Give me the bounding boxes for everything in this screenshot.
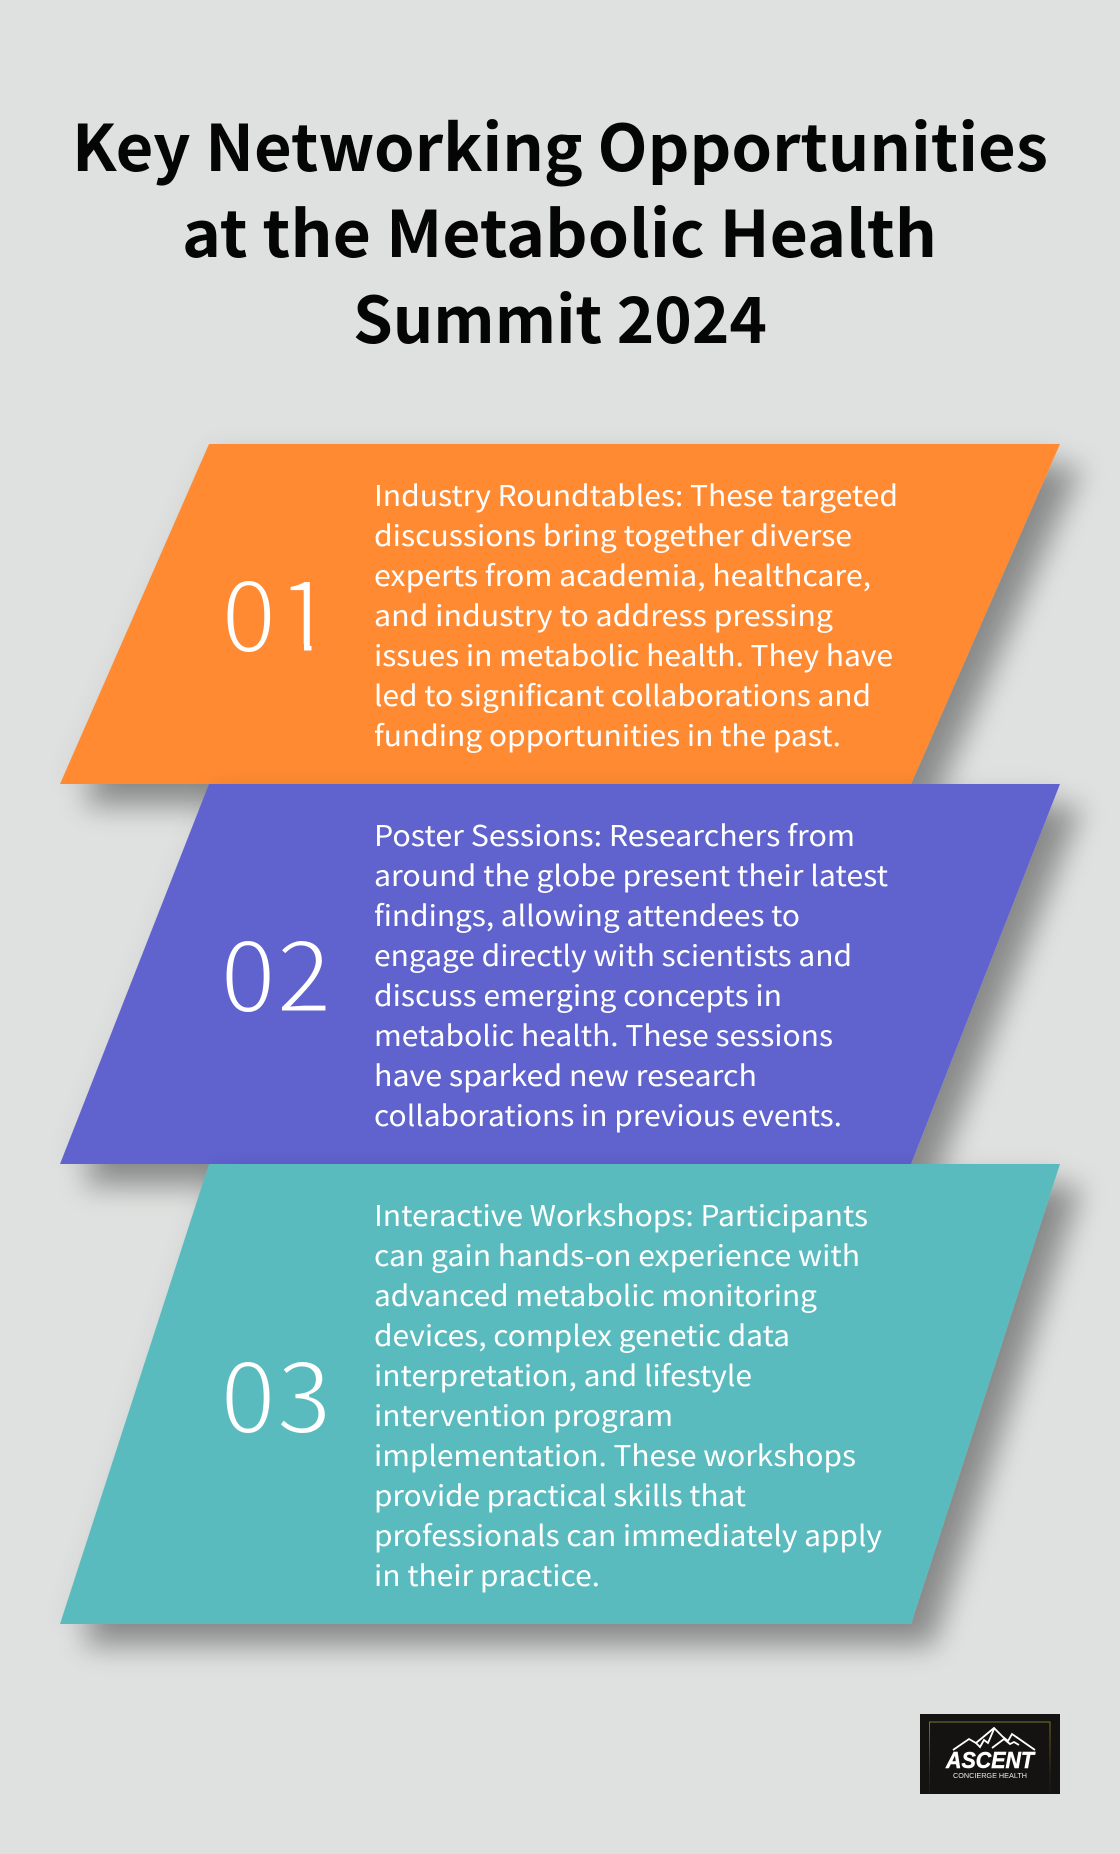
text: Interactive Workshops: in their practice. (374, 1554, 600, 1595)
text: Poster Sessions: engage directly with scientists and (374, 934, 852, 975)
panel: 02 Poster Sessions (60, 784, 1060, 1164)
text: Poster Sessions: Poster Sessions: Researchers from (374, 814, 855, 855)
number 01 (221, 536, 338, 681)
text: Industry Roundtables: funding opportunities in the past. (374, 714, 841, 755)
logo wordmark: ASCENT (945, 1747, 1036, 1773)
text: Industry Roundtables: Industry Roundtables: These targeted (374, 474, 898, 515)
text: Interactive Workshops: implementation. These workshops (374, 1434, 856, 1475)
text: Poster Sessions: metabolic health. These sessions (374, 1014, 833, 1055)
purple parallelogram (60, 784, 1060, 1164)
text: Poster Sessions: findings, allowing attendees to (374, 894, 800, 935)
text: Interactive Workshops: provide practical skills that (374, 1474, 746, 1515)
title: at the Metabolic Health (182, 184, 937, 276)
text: Industry Roundtables: experts from academia, healthcare, (374, 554, 871, 595)
text: Interactive Workshops: advanced metabolic monitoring (374, 1274, 817, 1315)
text: Interactive Workshops: professionals can immediately apply (374, 1514, 882, 1555)
text: Poster Sessions: collaborations in previous events. (374, 1094, 842, 1135)
panel: 03 Interactive Workshops (60, 1164, 1060, 1624)
text: Industry Roundtables: led to significant collaborations and (374, 674, 871, 715)
text: Poster Sessions: around the globe present their latest (374, 854, 888, 895)
text: Interactive Workshops (374, 1194, 882, 1595)
text: Industry Roundtables: and industry to address pressing (374, 594, 833, 635)
text: Interactive Workshops: interpretation, and lifestyle (374, 1354, 752, 1395)
teal parallelogram (60, 1164, 1060, 1624)
icon: mountains (953, 1728, 1035, 1750)
number 02: 02 (220, 896, 332, 1041)
logo: Ascent Concierge Health (920, 1714, 1060, 1794)
title (72, 98, 1048, 362)
text: Poster Sessions: discuss emerging concepts in (374, 974, 782, 1015)
text: Interactive Workshops: devices, complex genetic data (374, 1314, 790, 1355)
title: Summit 2024 (353, 270, 767, 362)
text: Industry Roundtables (374, 474, 898, 755)
title: Key Networking Opportunities (72, 98, 1048, 190)
number 01: 1 (277, 536, 332, 681)
text: Industry Roundtables: discussions bring together diverse (374, 514, 852, 555)
logo tagline: CONCIERGE HEALTH (953, 1771, 1027, 1780)
orange parallelogram (60, 444, 1060, 784)
text: Poster Sessions: have sparked new research (374, 1054, 757, 1095)
text: Interactive Workshops: intervention program (374, 1394, 673, 1435)
text: Interactive Workshops: can gain hands-on experience with (374, 1234, 860, 1275)
text: Industry Roundtables: issues in metabolic health. They have (374, 634, 893, 675)
text: Interactive Workshops: Interactive Workshops: Participants (374, 1194, 868, 1235)
text: Poster Sessions (374, 814, 888, 1135)
panel: 01 Industry Roundtables (60, 444, 1060, 784)
number 01: 0 (221, 536, 276, 681)
number 03: 03 (220, 1317, 332, 1462)
